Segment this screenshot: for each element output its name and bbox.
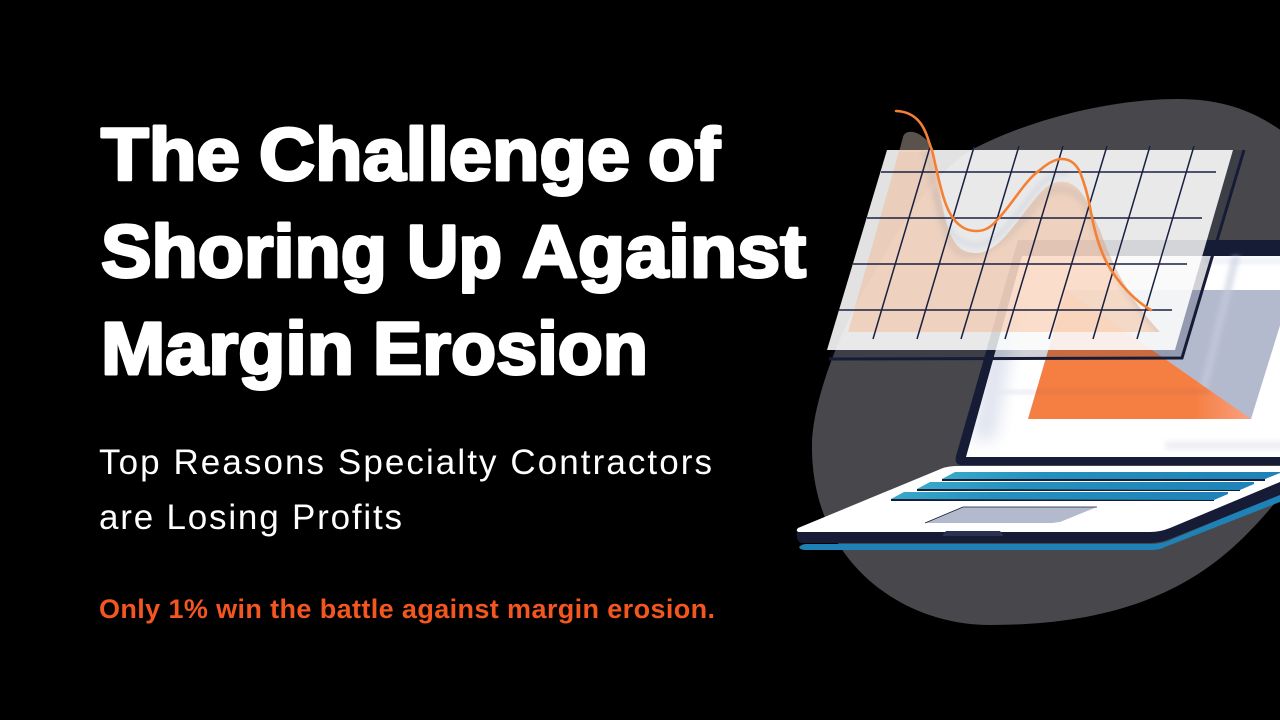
- title: of: [648, 113, 720, 196]
- background blob: [812, 99, 1280, 625]
- base edge: [797, 481, 1280, 543]
- title: [101, 113, 806, 390]
- title: Against: [522, 210, 806, 293]
- panel drop shadow: [829, 150, 1244, 359]
- area fill: [848, 132, 1160, 332]
- screen shading: [972, 258, 1280, 450]
- orange triangle chart: [1028, 290, 1251, 419]
- chart panel: [827, 150, 1233, 350]
- area edge shading: [926, 150, 1160, 332]
- subtitle: are Losing Profits: [99, 498, 402, 537]
- callout: Only 1% win the battle against margin erosion.: [99, 594, 715, 624]
- keyboard row 2: [917, 482, 1254, 491]
- illustration: laptop with chart: [797, 99, 1280, 625]
- keyboard row 1: [942, 472, 1280, 481]
- title: Up: [407, 210, 502, 293]
- title: The: [101, 113, 240, 196]
- keyboard row 3: [891, 492, 1228, 501]
- base top: [797, 466, 1280, 532]
- trackpad: [925, 507, 1097, 523]
- title: Shoring: [101, 210, 387, 293]
- title: Challenge: [259, 113, 630, 196]
- peak above panel: [899, 132, 932, 152]
- screen display: [966, 256, 1280, 457]
- base underside blue: [799, 494, 1280, 550]
- screen reflection: [1198, 256, 1240, 395]
- subtitle: Top Reasons Specialty Contractors: [99, 443, 712, 482]
- area halo: [935, 173, 1068, 245]
- peach area chart: [848, 132, 1160, 332]
- laptop screen: [956, 240, 1280, 465]
- panel shadow outline: [829, 150, 1244, 359]
- grid lines: [839, 146, 1216, 339]
- frame seen through panel: [986, 240, 1206, 350]
- subtitle: [99, 443, 712, 537]
- front notch: [943, 531, 1003, 536]
- screen frame: [956, 240, 1280, 465]
- screen chart backdrop: [1028, 290, 1280, 419]
- laptop base: [797, 466, 1280, 550]
- title: Erosion: [373, 307, 648, 390]
- orange trend line: [896, 111, 1151, 310]
- title: Margin: [101, 307, 354, 390]
